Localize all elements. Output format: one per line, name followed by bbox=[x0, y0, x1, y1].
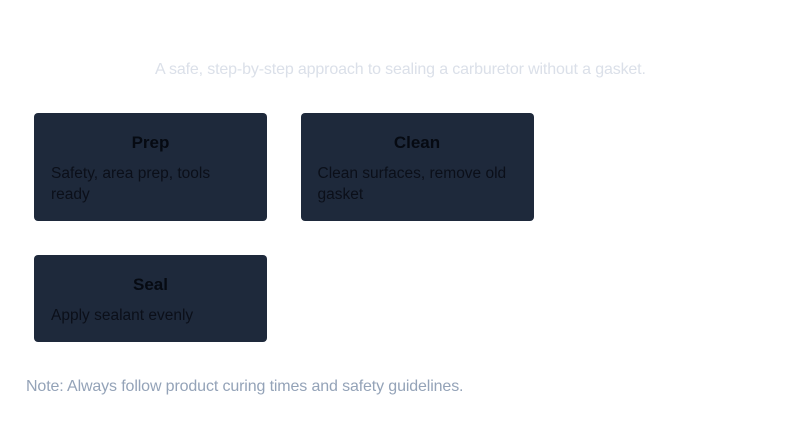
text: clean description: Clean surfaces, remove old bbox=[318, 165, 506, 182]
text: prep description: ready bbox=[51, 186, 90, 203]
text: seal description: Apply sealant evenly bbox=[51, 307, 193, 324]
panel: seal bbox=[34, 255, 267, 342]
text: prep description bbox=[51, 165, 210, 203]
heading: seal: Seal bbox=[133, 275, 168, 294]
subtitle: A safe, step-by-step approach to sealing a carburetor without a gasket. bbox=[155, 61, 646, 78]
footnote: Note: Always follow product curing times and safety guidelines. bbox=[26, 378, 463, 395]
heading: clean: Clean bbox=[394, 133, 440, 152]
heading: prep: Prep bbox=[132, 133, 169, 152]
text: clean description bbox=[318, 165, 506, 203]
panel: prep bbox=[34, 113, 267, 221]
text: prep description: Safety, area prep, tools bbox=[51, 165, 210, 182]
text: clean description: gasket bbox=[318, 186, 363, 203]
panel: clean bbox=[300, 113, 534, 221]
